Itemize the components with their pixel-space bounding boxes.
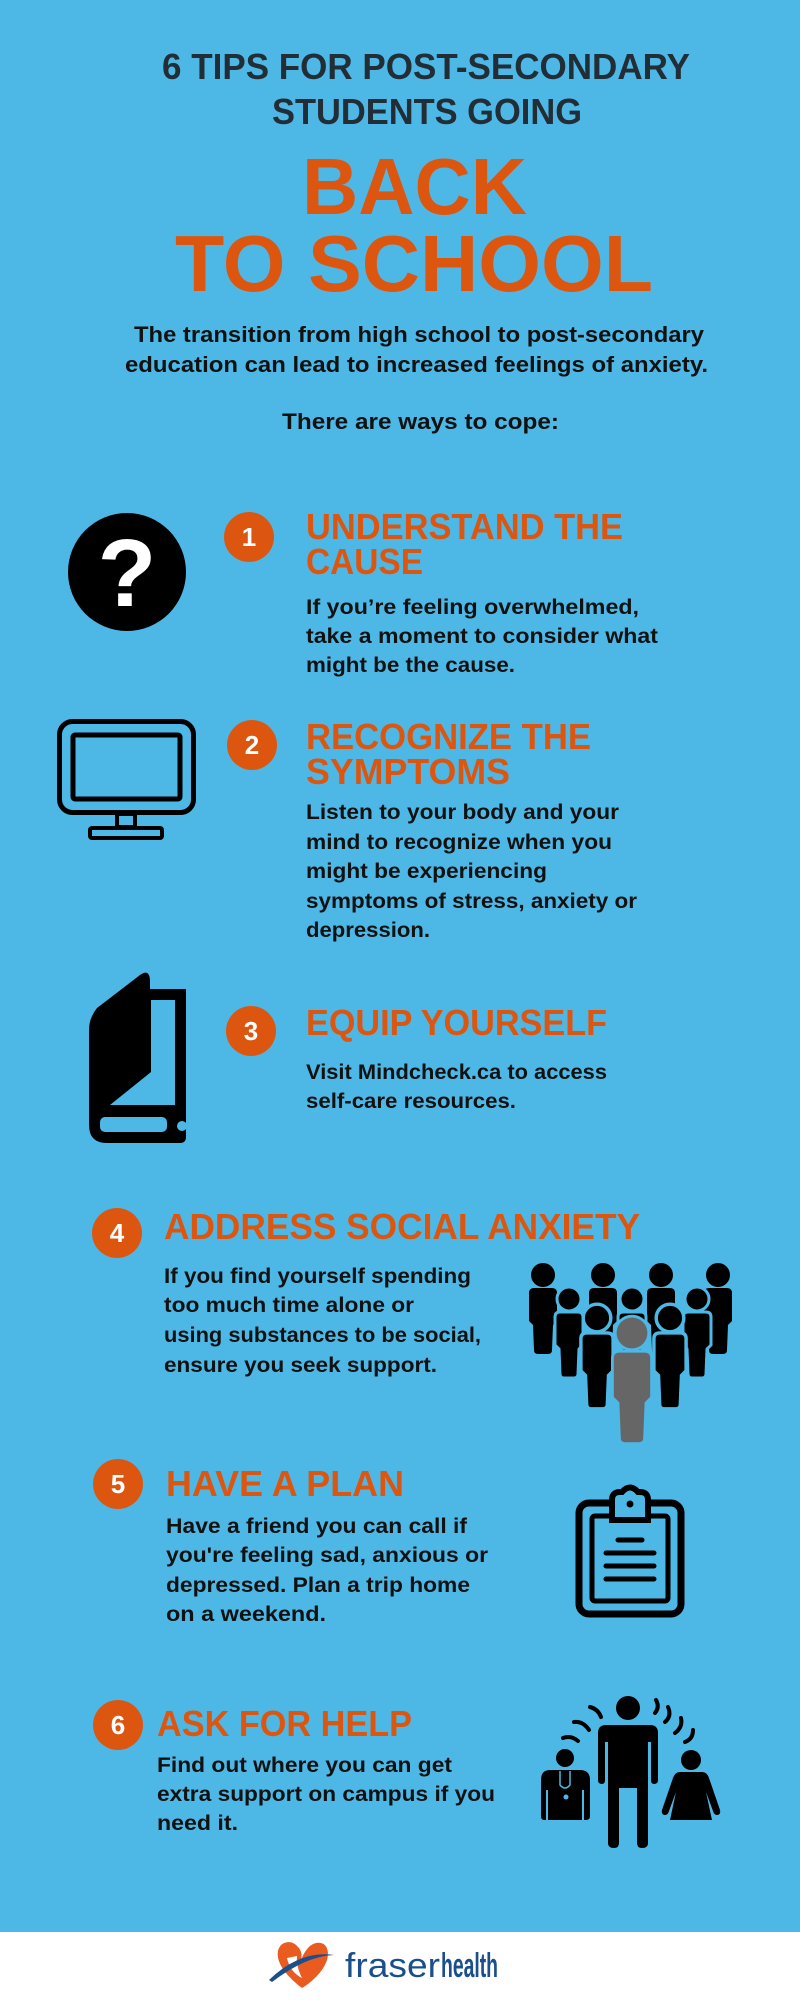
- body 6: Find out where you can get: [157, 1754, 452, 1777]
- heading 2: RECOGNIZE THE: [306, 716, 591, 757]
- body 1: might be the cause.: [306, 654, 515, 677]
- body 4: [164, 1265, 481, 1377]
- heading 3: EQUIP YOURSELF: [306, 1002, 607, 1043]
- panel: tip 2: [60, 716, 637, 942]
- title: 6 TIPS FOR POST-SECONDARY: [162, 46, 690, 87]
- body 1: take a moment to consider what: [306, 625, 658, 648]
- heading 1: CAUSE: [306, 541, 423, 582]
- body 3: Visit Mindcheck.ca to access: [306, 1061, 607, 1084]
- panel: tip 4: [92, 1206, 732, 1444]
- logo: fraserhealth: fraser: [345, 1947, 440, 1985]
- footer: [0, 1932, 800, 2000]
- body 3: [306, 1061, 607, 1113]
- icon: clipboard: [579, 1488, 681, 1614]
- number 2: [227, 720, 277, 770]
- icon: question mark: ?: [98, 520, 156, 627]
- icon: people helping: [541, 1696, 720, 1848]
- body 3: self-care resources.: [306, 1090, 516, 1113]
- heading 1: UNDERSTAND THE: [306, 506, 623, 547]
- title: [162, 46, 690, 132]
- icon: monitor: [60, 722, 194, 838]
- number 4: [92, 1208, 142, 1258]
- number 3: [226, 1006, 276, 1056]
- body 5: on a weekend.: [166, 1603, 326, 1626]
- heading 6: ASK FOR HELP: [157, 1703, 412, 1744]
- heading: back to school: [175, 142, 653, 308]
- body 1: If you’re feeling overwhelmed,: [306, 596, 639, 619]
- body 6: need it.: [157, 1812, 238, 1835]
- logo: fraserhealth: [269, 1942, 498, 1988]
- body 2: symptoms of stress, anxiety or: [306, 890, 637, 913]
- number 6: 6: [111, 1710, 125, 1740]
- icon: crowd of people: [529, 1263, 732, 1444]
- heading 2: [306, 716, 591, 792]
- icon: question mark: [68, 513, 186, 631]
- body 1: [306, 596, 658, 677]
- number 1: [224, 512, 274, 562]
- logo: fraserhealth: health: [441, 1947, 498, 1985]
- number 2: 2: [245, 730, 259, 760]
- panel: tip 3: [89, 973, 607, 1143]
- body 4: If you find yourself spending: [164, 1265, 471, 1288]
- body 2: Listen to your body and your: [306, 801, 619, 824]
- body 2: [306, 801, 637, 942]
- number 1: 1: [242, 522, 256, 552]
- heading 2: SYMPTOMS: [306, 751, 510, 792]
- body 4: ensure you seek support.: [164, 1354, 437, 1377]
- body 2: mind to recognize when you: [306, 831, 612, 854]
- body 4: using substances to be social,: [164, 1324, 481, 1347]
- body 6: [157, 1754, 495, 1835]
- intro text: There are ways to cope:: [282, 409, 559, 434]
- heading: back to school: BACK: [302, 142, 527, 231]
- body 2: depression.: [306, 919, 430, 942]
- number 6: [93, 1700, 143, 1750]
- body 4: too much time alone or: [164, 1294, 414, 1317]
- number 4: 4: [110, 1218, 125, 1248]
- number 5: 5: [111, 1469, 125, 1499]
- panel: tip 1: [68, 506, 658, 677]
- icon: book: [89, 973, 187, 1143]
- panel: tip 5: [93, 1459, 681, 1626]
- number 5: [93, 1459, 143, 1509]
- number 3: 3: [244, 1016, 258, 1046]
- intro text: education can lead to increased feelings of anxiety.: [125, 352, 708, 377]
- panel: tip 6: [93, 1696, 720, 1848]
- body 5: [166, 1515, 488, 1626]
- body 5: depressed. Plan a trip home: [166, 1574, 470, 1597]
- heading 1: [306, 506, 623, 582]
- body 2: might be experiencing: [306, 860, 547, 883]
- body 5: Have a friend you can call if: [166, 1515, 468, 1538]
- heading 5: HAVE A PLAN: [166, 1463, 404, 1504]
- body 6: extra support on campus if you: [157, 1783, 495, 1806]
- intro text: [125, 322, 708, 434]
- heading 4: ADDRESS SOCIAL ANXIETY: [164, 1206, 640, 1247]
- title: STUDENTS GOING: [272, 91, 582, 132]
- intro text: The transition from high school to post-secondary: [134, 322, 705, 347]
- heading: back to school: TO SCHOOL: [175, 219, 653, 308]
- body 5: you're feeling sad, anxious or: [166, 1544, 488, 1567]
